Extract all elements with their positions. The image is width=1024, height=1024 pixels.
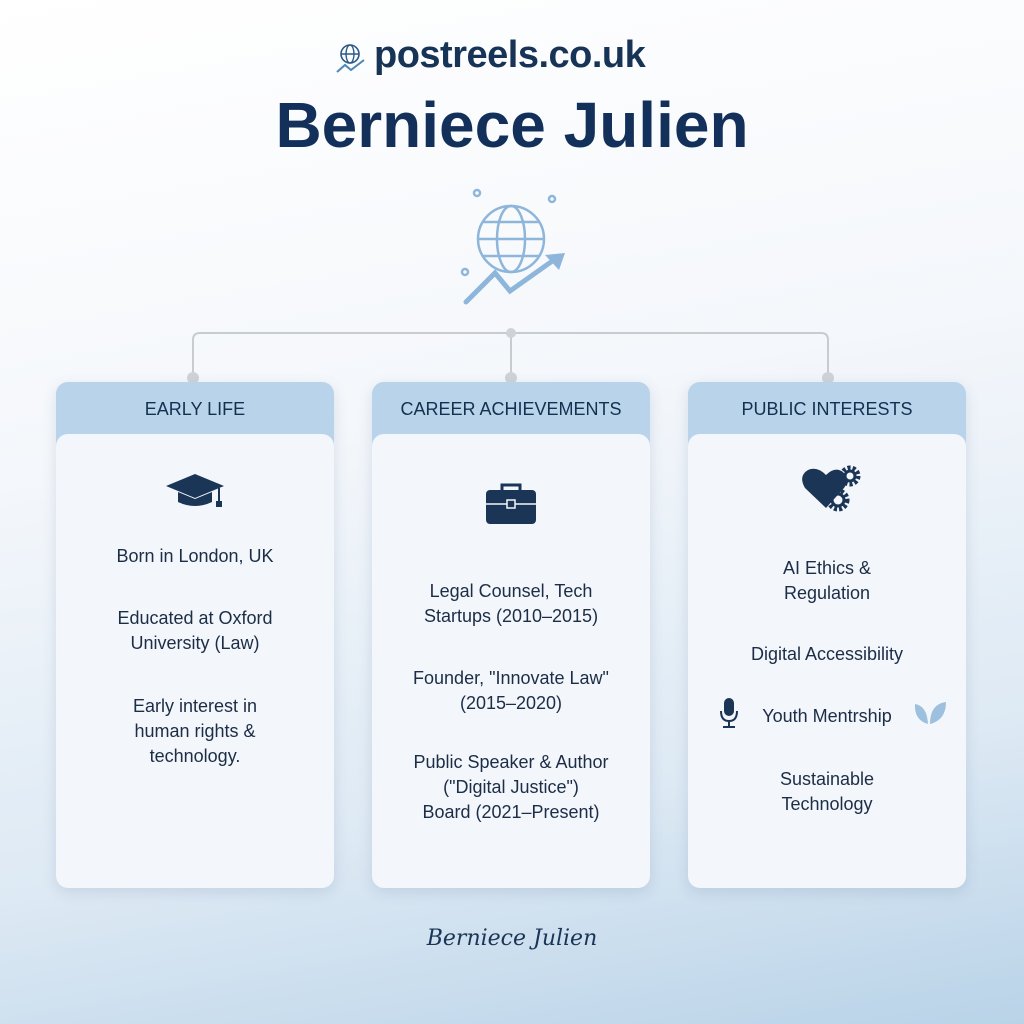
panel: early life: Educated at Oxford bbox=[117, 608, 273, 628]
signature: Berniece Julien bbox=[427, 926, 597, 951]
icon: microphone bbox=[720, 698, 738, 728]
text block: Regulation bbox=[784, 583, 870, 603]
panel: public interests bbox=[688, 382, 966, 888]
heading: early life: EARLY LIFE bbox=[145, 399, 245, 419]
heading: career: CAREER ACHIEVEMENTS bbox=[400, 399, 622, 419]
text block bbox=[783, 558, 871, 603]
title: Berniece Julien bbox=[275, 89, 749, 161]
panel: public interests: Sustainable bbox=[780, 769, 874, 789]
text block: AI Ethics & bbox=[783, 558, 871, 578]
text block: Startups (2010–2015) bbox=[424, 606, 598, 626]
panel: public interests: Digital Accessibility bbox=[751, 644, 903, 664]
panel: early life bbox=[56, 382, 334, 888]
panel: career achievements: Board (2021–Present) bbox=[422, 802, 600, 822]
heading: public interests: PUBLIC INTERESTS bbox=[741, 399, 913, 419]
panel: career achievements bbox=[372, 382, 650, 888]
panel: early life: technology. bbox=[150, 746, 240, 766]
panel: career achievements: Founder, "Innovate Law" bbox=[413, 668, 609, 688]
panel: career achievements: (2015–2020) bbox=[460, 693, 562, 713]
icon: leaf bbox=[915, 702, 946, 724]
panel: public interests: Technology bbox=[781, 794, 873, 814]
panel: early life: Early interest in bbox=[133, 696, 257, 716]
panel: career achievements: Public Speaker & Author bbox=[413, 752, 609, 772]
text block: Legal Counsel, Tech bbox=[430, 581, 592, 601]
icon: heart and gears bbox=[802, 466, 860, 512]
connector lines bbox=[187, 328, 834, 382]
panel: early life: University (Law) bbox=[130, 633, 260, 653]
text block bbox=[424, 581, 598, 626]
icon: briefcase bbox=[486, 484, 536, 524]
icon: graduation cap bbox=[166, 474, 224, 507]
panel: public interests: Youth Mentrship bbox=[762, 706, 892, 726]
panel: early life: human rights & bbox=[134, 721, 256, 741]
logo: postreels.co.uk bbox=[374, 34, 645, 76]
icon: globe with arrow bbox=[460, 188, 565, 304]
text block: Born in London, UK bbox=[116, 546, 274, 566]
panel: career achievements: ("Digital Justice") bbox=[443, 777, 579, 797]
